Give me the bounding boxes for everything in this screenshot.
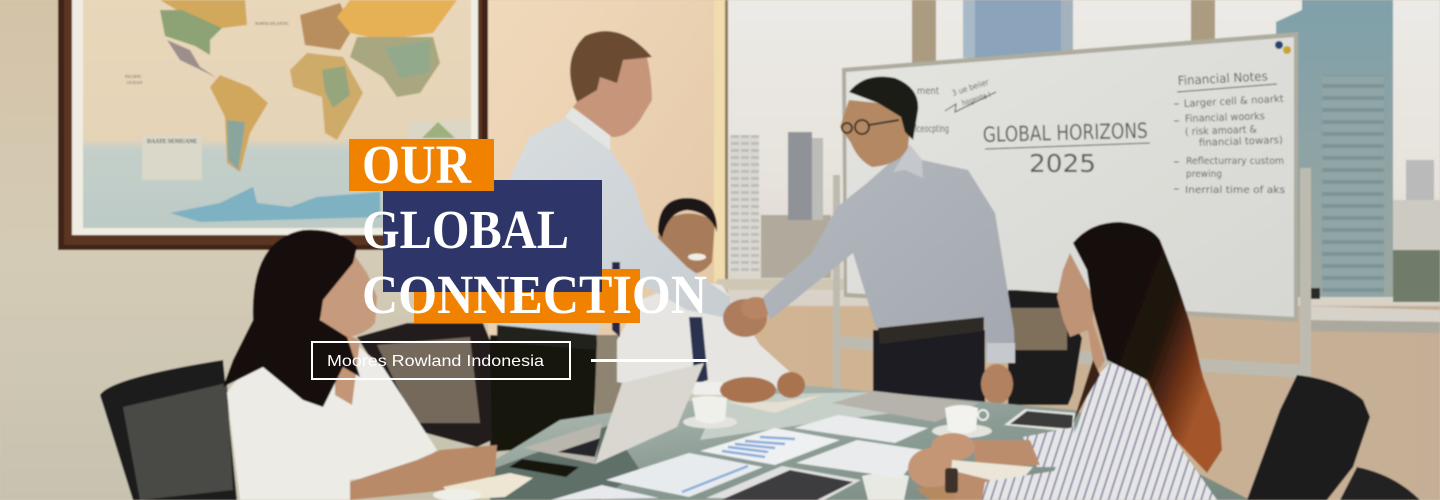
map labels: OCEAN	[127, 80, 143, 85]
tagline box	[312, 342, 570, 379]
whiteboard writing: financial towars)	[1199, 135, 1283, 149]
whiteboard writing: lceocpting	[915, 124, 949, 135]
map labels: PACIFIC	[125, 74, 142, 79]
whiteboard writing: ment	[917, 86, 939, 97]
handshake	[723, 297, 771, 337]
seated man hands and notebook	[694, 372, 822, 413]
meeting table	[490, 363, 1250, 500]
standing man at back	[490, 31, 732, 452]
phone	[509, 459, 579, 477]
tablet	[1004, 409, 1075, 432]
map labels: DAATE SENIUANE	[147, 138, 197, 145]
wall map	[58, 0, 488, 250]
title: GLOBAL	[362, 199, 569, 260]
closed laptop	[832, 391, 979, 422]
whiteboard writing	[915, 68, 1285, 196]
navy block behind GLOBAL	[383, 180, 602, 292]
window view with skyline	[717, 0, 1440, 333]
title: CONNECTION	[362, 264, 707, 325]
woman on left	[223, 230, 533, 500]
accent line	[591, 359, 708, 362]
open laptop	[523, 363, 704, 464]
whiteboard stand	[833, 168, 1320, 390]
front right chairs	[1247, 375, 1420, 500]
whiteboard writing: Reflecturrary custom	[1186, 156, 1284, 167]
map labels	[125, 21, 289, 145]
whiteboard writing: GLOBAL HORIZONS	[983, 119, 1148, 147]
whiteboard writing: Financial woorks	[1185, 111, 1265, 125]
chair behind left woman	[100, 323, 492, 500]
whiteboard writing: 3 ue beiier	[951, 77, 990, 98]
chair behind right man	[1008, 290, 1082, 405]
whiteboard writing: Larger cell & noarkt	[1184, 94, 1284, 110]
whiteboard writing: ( risk amoart &	[1185, 124, 1257, 138]
orange block behind OUR	[349, 139, 494, 191]
title	[362, 134, 707, 325]
whiteboard writing: Inerrial time of aks	[1185, 185, 1285, 196]
whiteboard	[842, 32, 1298, 322]
seated man in centre	[617, 198, 790, 395]
magnets	[1275, 41, 1291, 54]
cups	[683, 396, 992, 500]
map continents	[142, 0, 457, 222]
whiteboard writing: hogente !	[961, 90, 992, 108]
printed reports	[551, 415, 928, 500]
woman on right	[908, 222, 1222, 500]
map labels: NORTH ATLANTIC	[255, 21, 289, 26]
title: OUR	[362, 134, 472, 195]
tagline box: Moores Rowland Indonesia	[327, 353, 544, 370]
orange block behind CONNECTION	[414, 269, 640, 323]
whiteboard writing: 2025	[1029, 149, 1096, 178]
standing man on right	[763, 77, 1015, 404]
whiteboard writing: Financial Notes	[1177, 68, 1268, 88]
whiteboard writing: prewing	[1186, 169, 1222, 180]
